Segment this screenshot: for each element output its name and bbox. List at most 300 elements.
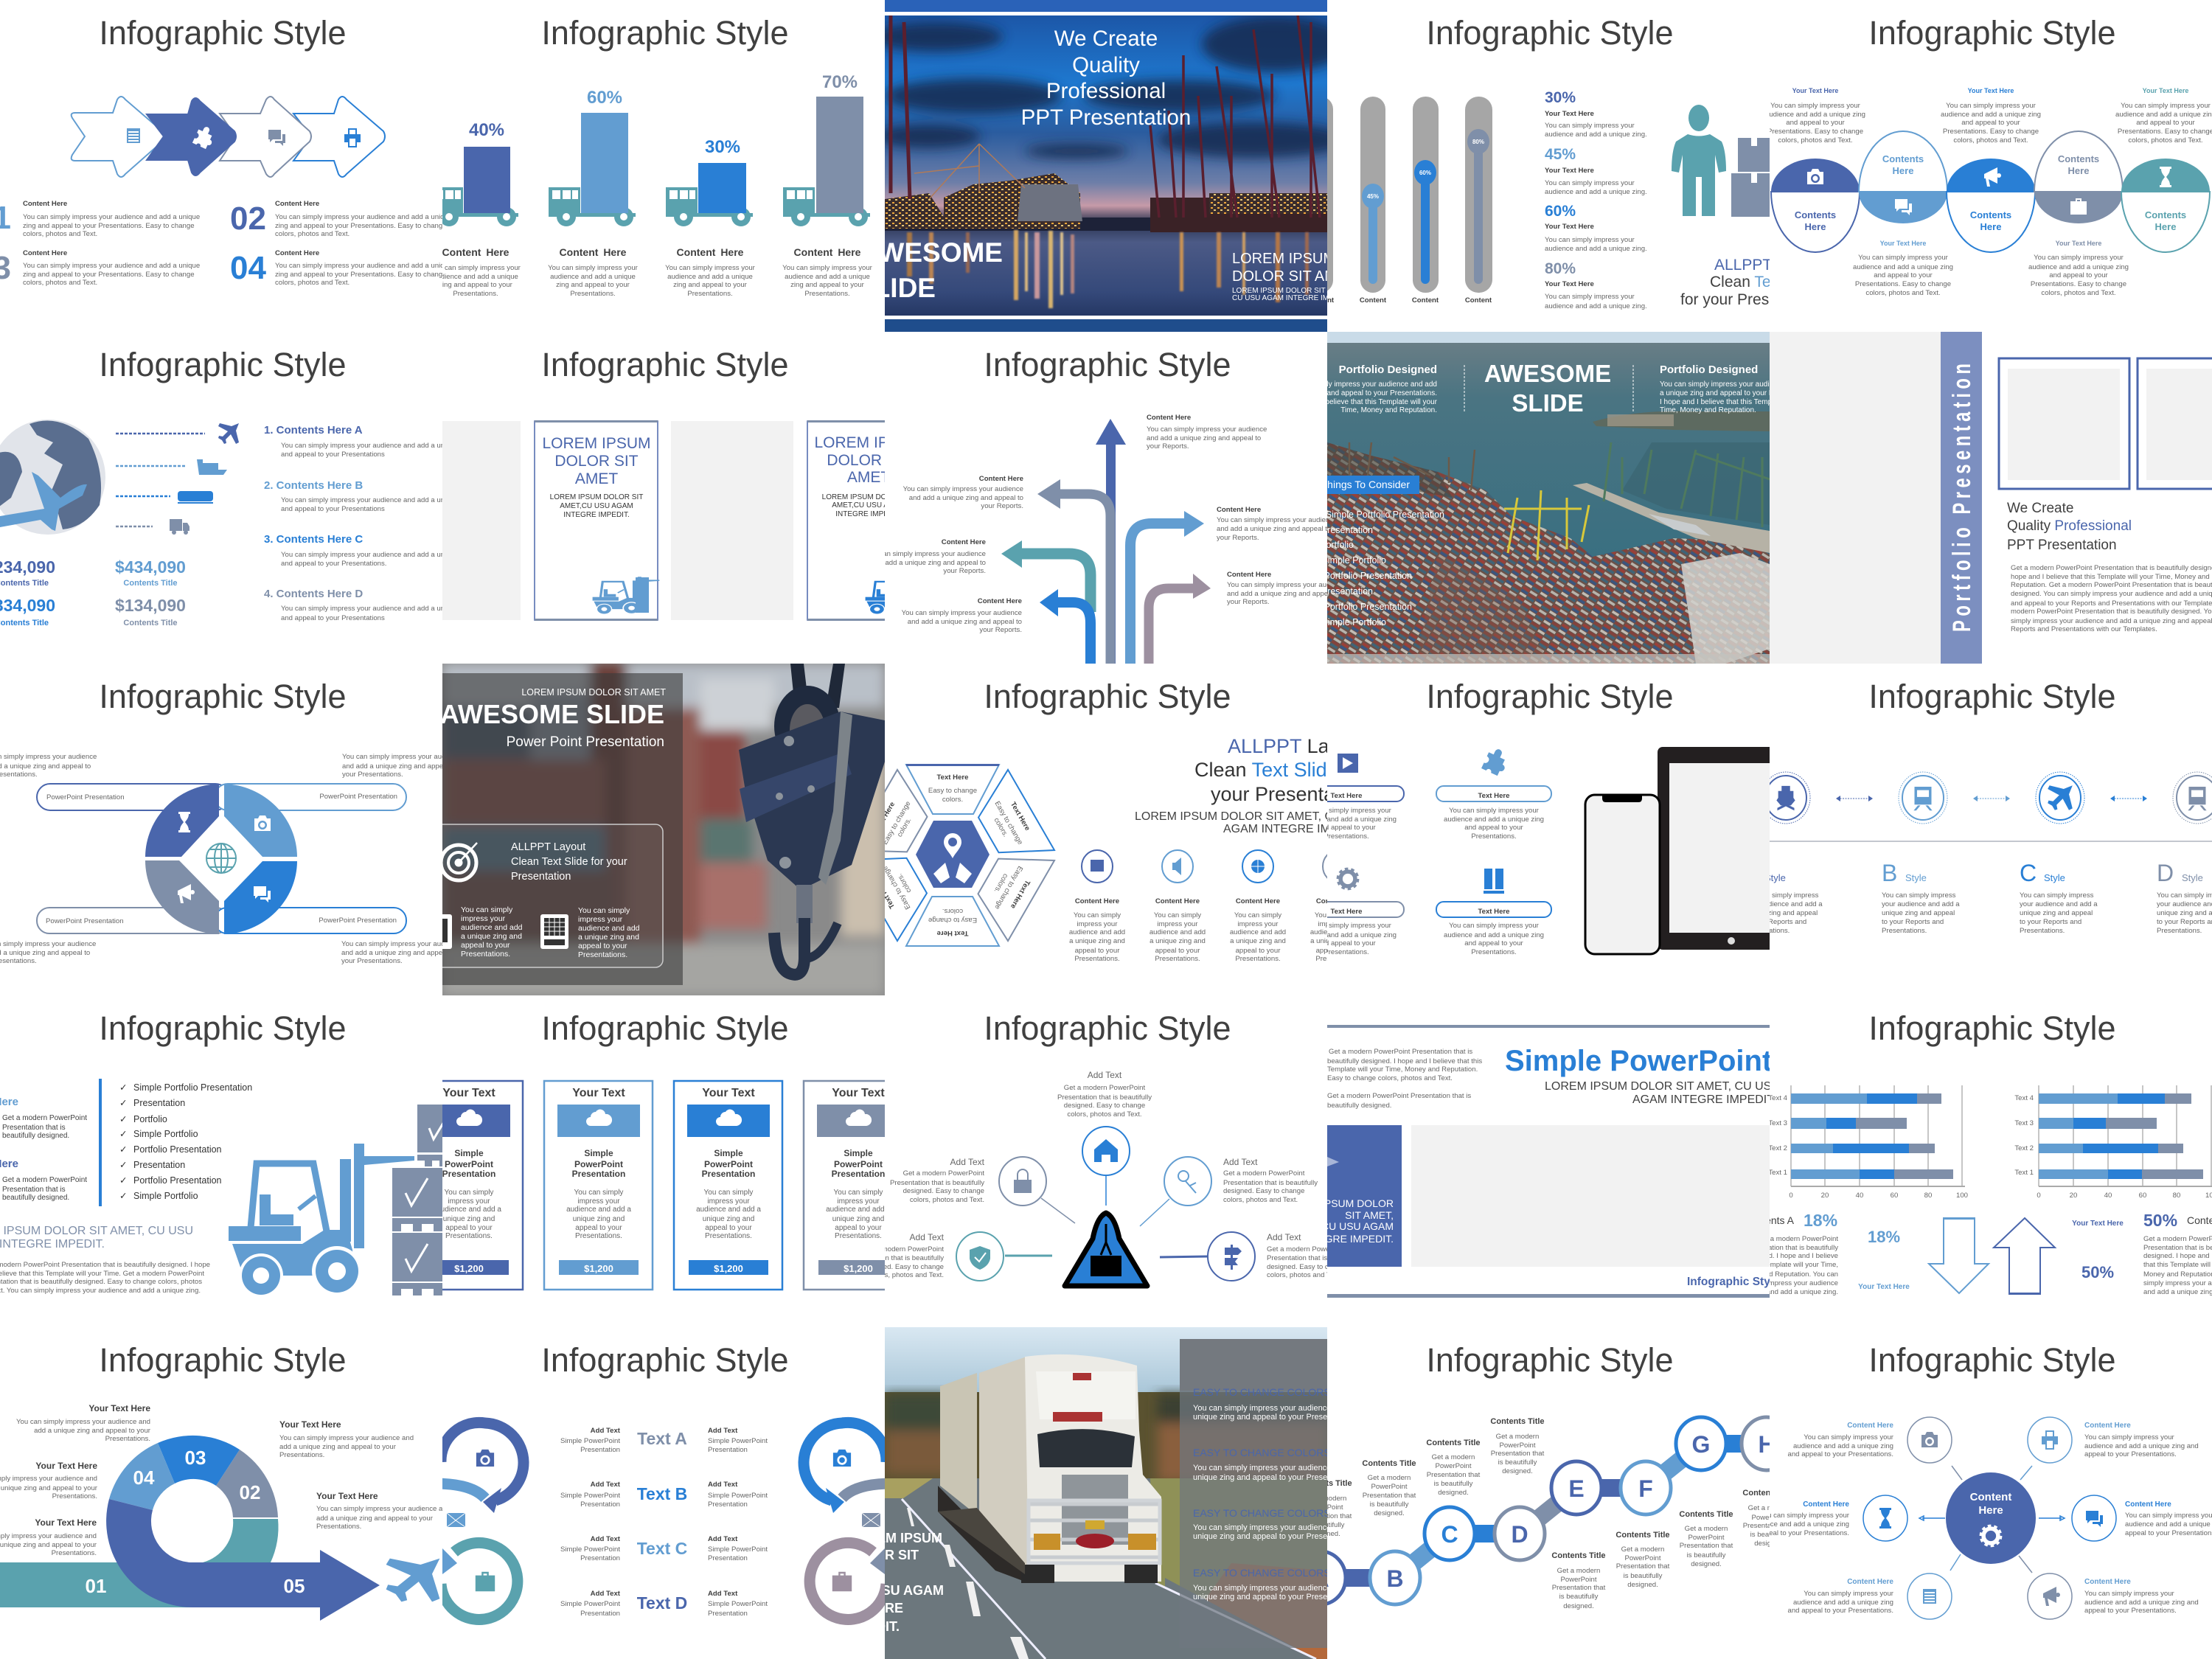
stat: 60%: You can simply impress your xyxy=(1545,236,1635,244)
note 03: Content Here xyxy=(23,249,67,257)
item: A style: Presentations. xyxy=(1745,927,1790,935)
node C: C xyxy=(1441,1521,1458,1548)
card two: DOLOR SIT xyxy=(827,452,911,469)
pill: top right: Text Here xyxy=(1478,792,1510,800)
heading: Quality Professional xyxy=(2007,518,2132,534)
badge: ship xyxy=(1761,772,1810,824)
chart: right stacked bars xyxy=(2014,1085,2212,1200)
text: awesome slide: SLIDE xyxy=(855,273,936,303)
stat: contents A 18%: simply impress your audience xyxy=(1745,1279,1838,1287)
hexagon segment lower left xyxy=(851,835,940,941)
arc: right envelope route xyxy=(842,1484,892,1527)
pill: bottom right: and appeal to your xyxy=(1464,939,1524,947)
text: keypad note: You can simply xyxy=(578,906,630,915)
card: mid blue: impress your xyxy=(577,1197,620,1206)
device: tablet xyxy=(1658,747,1805,950)
node F xyxy=(1621,1461,1671,1514)
arrow: link two xyxy=(1973,796,2010,801)
text: heading group: LOREM IPSUM DOLOR SIT AMET xyxy=(521,687,666,698)
text: left column: I hope and I believe that this Template will your xyxy=(1284,398,1438,406)
row: text A: Text A xyxy=(637,1429,687,1448)
pill: top left: Text Here xyxy=(1330,792,1363,800)
arrow: right blue xyxy=(1130,511,1204,664)
card two: AMET,CU USU AGAM xyxy=(832,501,905,509)
icon: stacked boxes xyxy=(1731,138,1770,217)
text: title group 3: PowerPoint xyxy=(1371,1483,1408,1491)
paragraph: beautifully designed. I hope and I believe that this xyxy=(1327,1057,1482,1065)
card: bright blue xyxy=(674,1081,782,1290)
list: portfolio items: Simple Portfolio xyxy=(1321,617,1386,627)
wave stage 5: Here xyxy=(2155,221,2176,232)
content item three xyxy=(1230,850,1286,963)
stat: 45%: audience and add a unique zing. xyxy=(1545,188,1647,196)
button: things to consider: Things To Consider xyxy=(1321,479,1410,490)
badge: train xyxy=(2173,772,2212,824)
text: title group 1: is beautifully xyxy=(1498,1458,1537,1467)
title: Infographic Style xyxy=(984,346,1231,383)
blue side panel xyxy=(1281,1125,1402,1267)
text: top note: and add a unique zing and appeal to xyxy=(1147,434,1261,442)
hub circle: Here xyxy=(1978,1504,2003,1517)
ring: case right xyxy=(810,1543,886,1619)
card: slate: You can simply xyxy=(834,1189,883,1197)
content item two: You can simply xyxy=(1154,911,1201,919)
arrow: road route xyxy=(116,519,189,535)
card: dark blue: Presentation xyxy=(442,1169,495,1179)
text: left note two: You can simply impress your audience xyxy=(866,550,986,558)
card: dark blue: appeal to your xyxy=(445,1224,493,1232)
pill: top left: audience and add a unique zing xyxy=(1296,815,1397,824)
text: contents C: and appeal to your Presentations. xyxy=(281,560,386,568)
pill: bottom right: Presentations. xyxy=(1471,948,1517,956)
text: title group 5: Presentation that xyxy=(1552,1584,1606,1592)
content item three: Presentations. xyxy=(1235,955,1281,963)
note 03: zing and appeal to your Presentations. Easy to change xyxy=(23,271,195,279)
text: title group 3: is beautifully xyxy=(1370,1500,1409,1509)
row: text A: Simple PowerPoint xyxy=(708,1437,768,1445)
card: dark blue: impress your xyxy=(448,1197,490,1206)
title: Infographic Style xyxy=(1868,14,2116,52)
title: Infographic Style xyxy=(1426,678,1674,715)
text: bottom note one: colors, photos and Text. xyxy=(1865,289,1941,297)
text: title group 1: designed. xyxy=(1502,1467,1533,1475)
icon: globe with plane xyxy=(0,420,105,535)
text: note one: You can simply impress your audience and xyxy=(16,1418,150,1426)
text: truck one caption: Presentations. xyxy=(453,290,498,298)
pill: bottom right xyxy=(1436,902,1551,956)
node D: D xyxy=(1511,1521,1528,1548)
title: Infographic Style xyxy=(99,346,347,383)
text: top note two: Presentations. Easy to change xyxy=(1943,128,2039,136)
pill: top left xyxy=(1289,786,1404,841)
text: left note two: Content Here xyxy=(942,538,986,546)
card: mid blue: appeal to your xyxy=(575,1224,622,1232)
text: left note three: your Reports. xyxy=(979,626,1022,634)
hub circle: Content xyxy=(1970,1491,2011,1503)
panel: simple powerpoint slide xyxy=(1281,1025,1780,1298)
chart: right stacked bars: 40 xyxy=(2104,1192,2112,1200)
heading: PPT Presentation xyxy=(2007,538,2117,553)
node: top house xyxy=(1082,1127,1130,1206)
stat: 30%: 30% xyxy=(1545,89,1576,106)
text: title group 7: is beautifully xyxy=(1687,1551,1726,1559)
text: easy colours two: You can simply impress your audience and add a xyxy=(1193,1464,1370,1472)
card: bright blue: $1,200 xyxy=(714,1263,743,1274)
heading xyxy=(1194,735,1367,805)
gauge: 80%: Content xyxy=(1465,296,1492,305)
chart: left stacked bars: 40 xyxy=(1856,1192,1863,1200)
arrow: sea route xyxy=(116,459,227,475)
text: title group 4: designed. xyxy=(1310,1530,1340,1538)
row: text C: Presentation xyxy=(580,1554,620,1562)
text: title group 7: PowerPoint xyxy=(1688,1534,1725,1542)
text: top right note: and add a unique zing and appeal to xyxy=(342,762,456,771)
ring: camera arrow left xyxy=(441,1422,524,1513)
text: title group 3: designed. xyxy=(1374,1509,1405,1517)
text: right note: Add Text xyxy=(1223,1157,1258,1167)
text: bottom right: audience and add a unique zing and xyxy=(2084,1599,2199,1607)
text: easy colours four: You can simply impress your audience and add a xyxy=(1193,1584,1370,1593)
photo: container port xyxy=(1327,332,1770,664)
stat: 80%: Your Text Here xyxy=(1545,280,1594,288)
text: title group 4: Presentation that xyxy=(1298,1512,1352,1520)
text: contents D: and appeal to your Presentations xyxy=(281,614,385,622)
picture frame two xyxy=(2138,358,2212,489)
blue side panel: SIT AMET, xyxy=(1345,1209,1394,1221)
text: bottom right: You can simply impress your xyxy=(2084,1590,2175,1598)
device: phone xyxy=(1585,795,1660,954)
ring: camera arrow right xyxy=(804,1422,886,1513)
text: top note two: You can simply impress your xyxy=(1946,102,2037,110)
text: top right note: your Presentations. xyxy=(342,771,403,779)
text: title group 1: Get a modern xyxy=(1496,1433,1539,1441)
text: top right note: You can simply impress your audience xyxy=(342,753,462,761)
text: lower left note: Get a modern PowerPoint xyxy=(863,1245,944,1253)
card: slate: Presentations. xyxy=(835,1232,882,1240)
content item four: You can simply xyxy=(1315,911,1362,919)
hexagon segment lower left: colors. xyxy=(896,872,913,894)
item: D style: Presentations. xyxy=(2157,927,2202,935)
text: bottom right note: and add a unique zing and appeal to xyxy=(341,949,456,957)
sidebar xyxy=(1941,332,1982,664)
text: top note: colors, photos and Text. xyxy=(1067,1110,1142,1119)
text: note four: Presentations. xyxy=(279,1451,324,1459)
text: easy colours four: unique zing and appeal to your Presentations. xyxy=(1193,1593,1358,1601)
title: Infographic Style xyxy=(541,1009,789,1047)
list: checklist: Presentation xyxy=(133,1160,185,1170)
gauge: 30% partial xyxy=(1307,97,1335,305)
text: contents B: and appeal to your Presentations xyxy=(281,505,385,513)
image placeholder xyxy=(1411,1125,1770,1267)
title: Infographic Style xyxy=(99,1341,347,1379)
text: phone note: audience and add xyxy=(461,923,523,932)
gauge: 80% xyxy=(1465,97,1492,305)
row: text B: Simple PowerPoint xyxy=(708,1492,768,1500)
text: keypad note: appeal to your xyxy=(578,942,627,950)
item: B style: B xyxy=(1882,860,1897,886)
chart: left stacked bars: Text 1 xyxy=(1768,1169,1787,1177)
card: bright blue: Your Text xyxy=(702,1087,755,1099)
card one: INTEGRE IMPEDIT. xyxy=(563,511,630,519)
list: portfolio items: Presentation xyxy=(1321,586,1373,597)
subheading: LOREM IPSUM DOLOR SIT AMET, CU USU xyxy=(1135,810,1370,823)
card: bright blue: You can simply xyxy=(704,1189,753,1197)
text: top right: audience and add a unique zing and xyxy=(2084,1442,2199,1450)
content item two: audience and add xyxy=(1150,928,1206,936)
gauge: 45%: Content xyxy=(1360,296,1387,305)
wave stage 3: Here xyxy=(1980,221,2001,232)
text: title group 6: is beautifully xyxy=(1624,1572,1663,1580)
number 04: 04 xyxy=(230,250,266,286)
text: title group 5: is beautifully xyxy=(1559,1593,1599,1601)
panel: crane hook photo slide xyxy=(428,664,885,995)
stat: $134,090: Contents Title xyxy=(123,619,178,627)
hexagon segment upper left xyxy=(851,770,940,875)
overlay panel xyxy=(1180,1339,1327,1648)
text: truck four caption: You can simply impress your xyxy=(782,264,873,272)
row: text A: Add Text xyxy=(591,1427,621,1435)
hexagon segment top: Text Here xyxy=(936,773,969,782)
text: truck three caption: Presentations. xyxy=(687,290,733,298)
content item two: appeal to your xyxy=(1155,947,1200,955)
title: Infographic Style xyxy=(984,1009,1231,1047)
text: truck two caption: zing and appeal to your xyxy=(556,281,630,289)
text: right note one: your Reports. xyxy=(1217,534,1259,542)
stat: contents A 18%: Presentation that is beautifully xyxy=(1744,1244,1838,1252)
text: clean text slide xyxy=(1680,257,1824,308)
button: things to consider xyxy=(1321,476,1419,494)
card: slate: Presentation xyxy=(832,1169,885,1179)
text: left lorem: DOLOR SIT xyxy=(846,1548,919,1562)
segment: megaphone xyxy=(145,860,219,934)
row: text D xyxy=(560,1590,768,1618)
text: title group 6: Get a modern xyxy=(1621,1545,1664,1554)
hexagon segment upper right: Text Here xyxy=(1009,801,1032,832)
text: left lorem: INTEGRE xyxy=(844,1601,903,1615)
text: left note: colors, photos and Text. xyxy=(910,1196,984,1204)
card: slate: impress your xyxy=(837,1197,880,1206)
text: title group 8: PowerPoint xyxy=(1751,1514,1788,1522)
item: B style: Style xyxy=(1905,872,1927,883)
text: note four: add a unique zing and appeal to your xyxy=(279,1443,397,1451)
list: checklist: Simple Portfolio xyxy=(133,1129,198,1139)
card: bright blue: appeal to your xyxy=(705,1224,752,1232)
chart: truck three 30% xyxy=(666,137,753,226)
node: left lock xyxy=(999,1157,1075,1223)
hub circle xyxy=(1946,1472,2036,1564)
text: here two: beautifully designed. xyxy=(2,1194,69,1202)
text: top note three xyxy=(2115,87,2212,145)
panel: container port photo slide xyxy=(1281,332,1816,664)
stat: $434,090 xyxy=(115,557,186,588)
item: B style: to your Reports and xyxy=(1882,918,1944,926)
pill: top left: and appeal to your xyxy=(1317,824,1377,832)
node D xyxy=(1495,1507,1545,1560)
chart: left stacked bars: 0 xyxy=(1789,1192,1793,1200)
card: mid blue: Presentations. xyxy=(575,1232,622,1240)
text: title group 3: Contents Title xyxy=(1362,1459,1416,1468)
paragraph: Get a modern PowerPoint Presentation that is xyxy=(1327,1092,1471,1100)
text: easy colours four: EASY TO CHANGE COLORS, xyxy=(1193,1567,1334,1579)
arrow: left slate xyxy=(1037,479,1110,664)
text: truck two caption: You can simply impress your xyxy=(548,264,639,272)
hexagon segment lower right xyxy=(965,835,1054,941)
heading: We Create xyxy=(2007,501,2073,516)
text: right column: a unique zing and appeal to your Presentations. xyxy=(1660,389,1816,397)
content item one xyxy=(1069,850,1125,963)
card one xyxy=(535,420,659,621)
text: bottom right note: your Presentations. xyxy=(341,957,403,965)
picture frame one xyxy=(1999,358,2129,489)
panel: wave of half circles xyxy=(1765,14,2212,297)
content item four: Content Here xyxy=(1316,897,1360,905)
note 04: zing and appeal to your Presentations. Easy to change xyxy=(275,271,447,279)
stat: contents A 18%: Contents A xyxy=(1743,1214,1795,1226)
node: calculator xyxy=(1907,1573,1952,1619)
gauge: 60%: Content xyxy=(1412,296,1439,305)
panel: globe and transport list xyxy=(0,346,473,627)
text: note one: add a unique zing and appeal to your xyxy=(34,1427,151,1435)
panel: lorem ipsum cards xyxy=(442,346,932,621)
chart: right stacked bars: 80 xyxy=(2173,1192,2180,1200)
text: left column: You can simply impress your audience and add xyxy=(1283,380,1437,389)
stat: contents B 50% xyxy=(2143,1211,2212,1296)
note 01: colors, photos and Text. xyxy=(23,230,97,238)
text: layout title: Presentation xyxy=(511,871,571,883)
heading: PPT Presentation xyxy=(1021,105,1191,130)
text: contents A: and appeal to your Presentations xyxy=(281,451,385,459)
text: title group 8: Presentation that xyxy=(1743,1522,1797,1530)
arrow: left blue xyxy=(1040,589,1091,664)
text: left lorem: IMPEDIT. xyxy=(844,1619,900,1634)
text: note three: Your Text Here xyxy=(35,1517,97,1528)
text: right note two: your Reports. xyxy=(1227,598,1270,606)
arrow: down 18%: Your Text Here xyxy=(1858,1283,1910,1291)
chart: left stacked bars: Text 4 xyxy=(1768,1094,1788,1102)
stat: 60%: Your Text Here xyxy=(1545,223,1594,231)
ring: case left xyxy=(441,1543,518,1619)
text: note five: add a unique zing and appeal to your xyxy=(316,1514,434,1523)
panel: pricing cards xyxy=(414,1009,912,1290)
text: right column: Time, Money and Reputation. xyxy=(1660,406,1756,414)
text: lower right note: Presentation that is beautifully xyxy=(1267,1254,1361,1262)
blue side panel: CU USU AGAM xyxy=(1321,1220,1394,1232)
chain connectors xyxy=(1321,1444,1767,1578)
panel: road train photo slide xyxy=(806,1327,1370,1659)
text: note two: Presentations. xyxy=(52,1492,97,1500)
title: Infographic Style xyxy=(1426,14,1674,52)
pill: top left xyxy=(37,784,229,810)
panel: content hub xyxy=(1744,1341,2212,1619)
image placeholder middle xyxy=(671,421,793,620)
content item one: You can simply xyxy=(1074,911,1121,919)
list: portfolio items: Portfolio Presentation xyxy=(1324,602,1412,612)
stat: 60%: 60% xyxy=(1545,203,1576,220)
card: bright blue: unique zing and xyxy=(703,1215,754,1223)
wave stage 2: Contents xyxy=(1882,153,1924,164)
pill: top right: and appeal to your xyxy=(1464,824,1524,832)
row: text D: Presentation xyxy=(580,1610,620,1618)
row: text A: Presentation xyxy=(708,1446,748,1454)
text: right column: Portfolio Designed xyxy=(1660,364,1758,376)
text: left note one: You can simply impress your audience xyxy=(903,485,1023,493)
stat: 45%: 45% xyxy=(1545,146,1576,163)
hexagon segment upper right: Easy to change xyxy=(992,800,1024,846)
text: top left: audience and add a unique zing xyxy=(1793,1442,1893,1450)
note 01: Content Here xyxy=(23,200,67,208)
text: right note: Presentation that is beautifully xyxy=(1223,1179,1318,1187)
text: title group 5: designed. xyxy=(1563,1602,1594,1610)
panel: direction arrows xyxy=(866,346,1347,664)
card one: DOLOR SIT xyxy=(554,453,639,470)
pill: bottom left: You can simply impress your xyxy=(1301,922,1392,930)
card: bright blue: PowerPoint xyxy=(704,1159,753,1169)
note 04: colors, photos and Text. xyxy=(275,279,349,287)
text: truck three caption: You can simply impress your xyxy=(665,264,756,272)
text: left note: Presentation that is beautifully xyxy=(890,1179,984,1187)
gauge: 30% partial: Content xyxy=(1307,296,1335,305)
text: bottom left: Content Here xyxy=(1847,1578,1893,1586)
item: C style: Style xyxy=(2044,872,2065,883)
icon: cargo warning triangle xyxy=(1065,1213,1147,1286)
text: easy colours three: You can simply impress your audience and add a xyxy=(1193,1523,1370,1532)
card: slate: appeal to your xyxy=(835,1224,882,1232)
chart: truck four 70%: 70% xyxy=(822,72,858,92)
text: title group 8: Get a modern xyxy=(1748,1504,1791,1512)
text: title group 8: designed. xyxy=(1754,1540,1785,1548)
node: megaphone xyxy=(2028,1573,2072,1619)
text: lower left note: Add Text xyxy=(910,1232,945,1242)
wave stage 1 xyxy=(1771,159,1860,252)
card: dark blue xyxy=(414,1081,523,1290)
text: top note one xyxy=(1765,87,1865,145)
text: left: Content Here xyxy=(1803,1500,1849,1509)
gauge: 45% xyxy=(1360,97,1387,305)
text: top note: Get a modern PowerPoint xyxy=(1064,1084,1146,1092)
arrow: step two filled xyxy=(147,98,236,175)
text: title group 4: Get a modern xyxy=(1304,1495,1346,1503)
card two: LOREM IPSUM DOLOR SIT xyxy=(822,493,915,501)
content item two: Presentations. xyxy=(1155,955,1200,963)
text: note five: Your Text Here xyxy=(316,1491,378,1501)
hexagon segment lower right: Easy to change xyxy=(992,864,1024,911)
text: bottom right note: You can simply impress your audience xyxy=(341,940,462,948)
list: portfolio items: Presentation xyxy=(1321,525,1373,535)
arrow: step three outline xyxy=(220,97,311,177)
text: lorem caption: DOLOR SIT AMET xyxy=(1232,268,1355,285)
list: checklist: Simple Portfolio Presentation xyxy=(133,1082,252,1093)
content item three: You can simply xyxy=(1234,911,1281,919)
panel: tablet and phone xyxy=(1289,678,1805,956)
title: Infographic Style xyxy=(984,678,1231,715)
row: text B: Simple PowerPoint xyxy=(560,1492,620,1500)
icon: plane xyxy=(386,1559,439,1601)
card: mid blue: Presentation xyxy=(572,1169,625,1179)
text: lorem caption: CU USU AGAM INTEGRE IMPEDIT. xyxy=(1232,294,1352,302)
row: text B: Text B xyxy=(637,1484,687,1503)
text: lower right note: designed. Easy to change xyxy=(1267,1263,1348,1271)
item: A style: You can simply impress xyxy=(1745,891,1819,900)
text: title group 6: Contents Title xyxy=(1615,1531,1670,1540)
panel: text A to D with cycle rings xyxy=(435,1341,892,1619)
row: text C xyxy=(560,1535,768,1562)
text: top note: Add Text xyxy=(1088,1070,1122,1080)
title: Infographic Style xyxy=(99,1009,347,1047)
segment 03: 03 xyxy=(185,1447,206,1469)
icon: globe xyxy=(206,844,236,873)
content item three: audience and add xyxy=(1230,928,1286,936)
text: top note two xyxy=(1941,87,2041,145)
